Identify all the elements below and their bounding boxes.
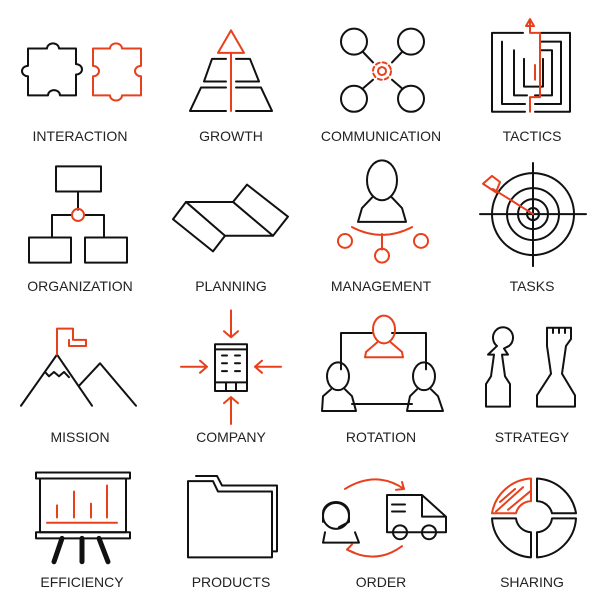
icon: mission	[21, 329, 136, 406]
icon: organization	[29, 166, 127, 263]
icon: management	[338, 160, 428, 263]
icon: tactics maze	[492, 19, 570, 112]
icon: products folder	[188, 476, 277, 557]
label: products: PRODUCTS	[192, 574, 270, 590]
label: communication: COMMUNICATION	[321, 128, 441, 144]
icon: sharing donut	[492, 479, 576, 557]
icons: top half	[22, 19, 586, 266]
icon: growth pyramid	[190, 30, 272, 111]
label: tactics: TACTICS	[503, 128, 561, 144]
icon: company	[181, 310, 281, 424]
label: growth: GROWTH	[199, 128, 263, 144]
label: organization: ORGANIZATION	[27, 278, 133, 294]
label: interaction: INTERACTION	[33, 128, 127, 144]
icon: planning	[173, 185, 288, 251]
label: efficiency: EFFICIENCY	[40, 574, 124, 590]
icon: communication	[341, 29, 424, 112]
label: sharing: SHARING	[500, 574, 564, 590]
icons: bottom half	[21, 310, 576, 562]
icon: order	[323, 479, 446, 557]
icon: strategy chess	[486, 327, 575, 407]
label: company: COMPANY	[196, 429, 267, 445]
icon: interaction puzzle	[22, 43, 141, 101]
icon: efficiency board	[36, 472, 130, 562]
label: planning: PLANNING	[195, 278, 267, 294]
label: strategy: STRATEGY	[495, 429, 570, 445]
icon: rotation	[322, 316, 443, 411]
label: mission: MISSION	[50, 429, 110, 445]
label: rotation: ROTATION	[346, 429, 416, 445]
label: order: ORDER	[356, 574, 406, 590]
label: tasks: TASKS	[510, 278, 554, 294]
icon: tasks target	[480, 163, 586, 266]
label: management: MANAGEMENT	[331, 278, 432, 294]
